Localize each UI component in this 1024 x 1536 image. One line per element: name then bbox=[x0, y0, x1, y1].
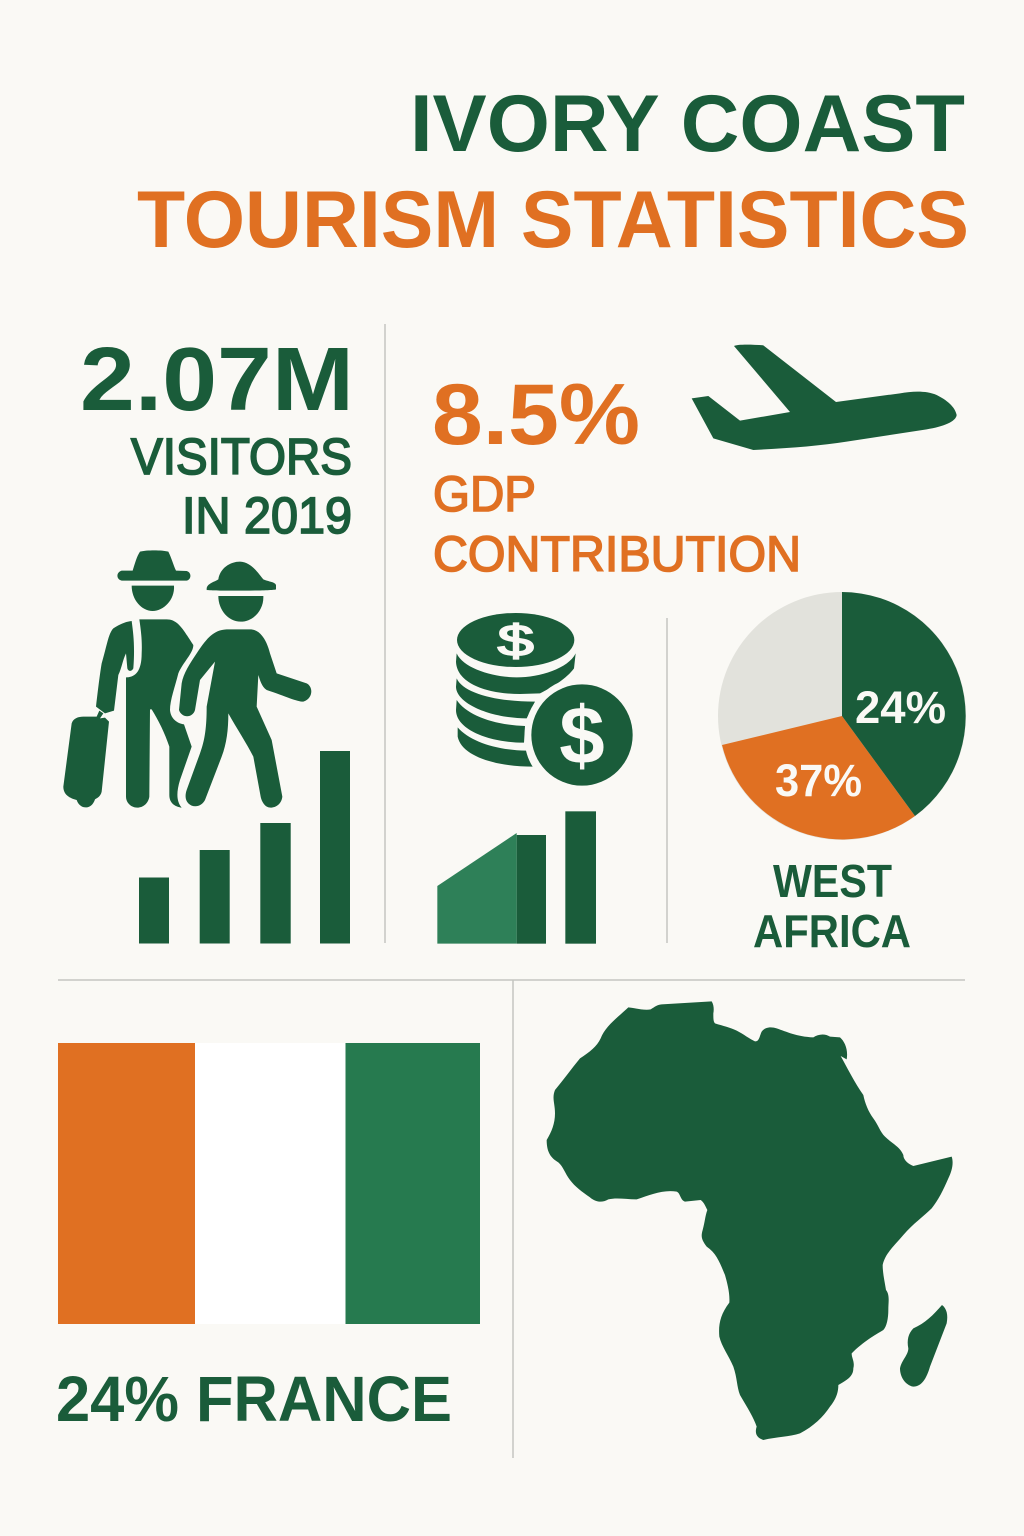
GDP statistic bbox=[432, 367, 801, 582]
GDP statistic: CONTRIBUTION bbox=[433, 526, 801, 582]
France statistic: 24% FRANCE bbox=[56, 1363, 452, 1435]
bar chart: GDP growth bbox=[437, 811, 596, 944]
title: TOURISM STATISTICS bbox=[137, 175, 969, 265]
visitors statistic: VISITORS bbox=[131, 428, 352, 485]
GDP statistic: GDP bbox=[433, 466, 536, 522]
GDP statistic: 8.5% bbox=[432, 367, 640, 463]
West Africa label: WEST bbox=[773, 855, 892, 907]
bar chart: visitors growth bbox=[139, 751, 350, 944]
icon: travelers with suitcase bbox=[63, 550, 311, 808]
map: Africa with Madagascar bbox=[547, 1001, 953, 1440]
icon: coin stack with dollar: $ bbox=[559, 690, 605, 781]
West Africa label: AFRICA bbox=[753, 905, 911, 957]
pie chart: West Africa share bbox=[718, 592, 966, 840]
pie chart: West Africa share: 37% bbox=[775, 755, 862, 806]
visitors statistic: IN 2019 bbox=[182, 487, 352, 544]
pie chart: West Africa share: 24% bbox=[855, 682, 946, 733]
title bbox=[137, 79, 969, 265]
West Africa label bbox=[753, 855, 911, 957]
title: IVORY COAST bbox=[410, 79, 965, 169]
icon: coin stack with dollar: $ bbox=[498, 616, 534, 665]
icon: airplane bbox=[692, 345, 957, 450]
visitors statistic bbox=[80, 330, 354, 544]
visitors statistic: 2.07M bbox=[80, 330, 354, 430]
icon: Ivory Coast flag bbox=[58, 1043, 480, 1324]
icon: coin stack with dollar bbox=[456, 613, 639, 792]
